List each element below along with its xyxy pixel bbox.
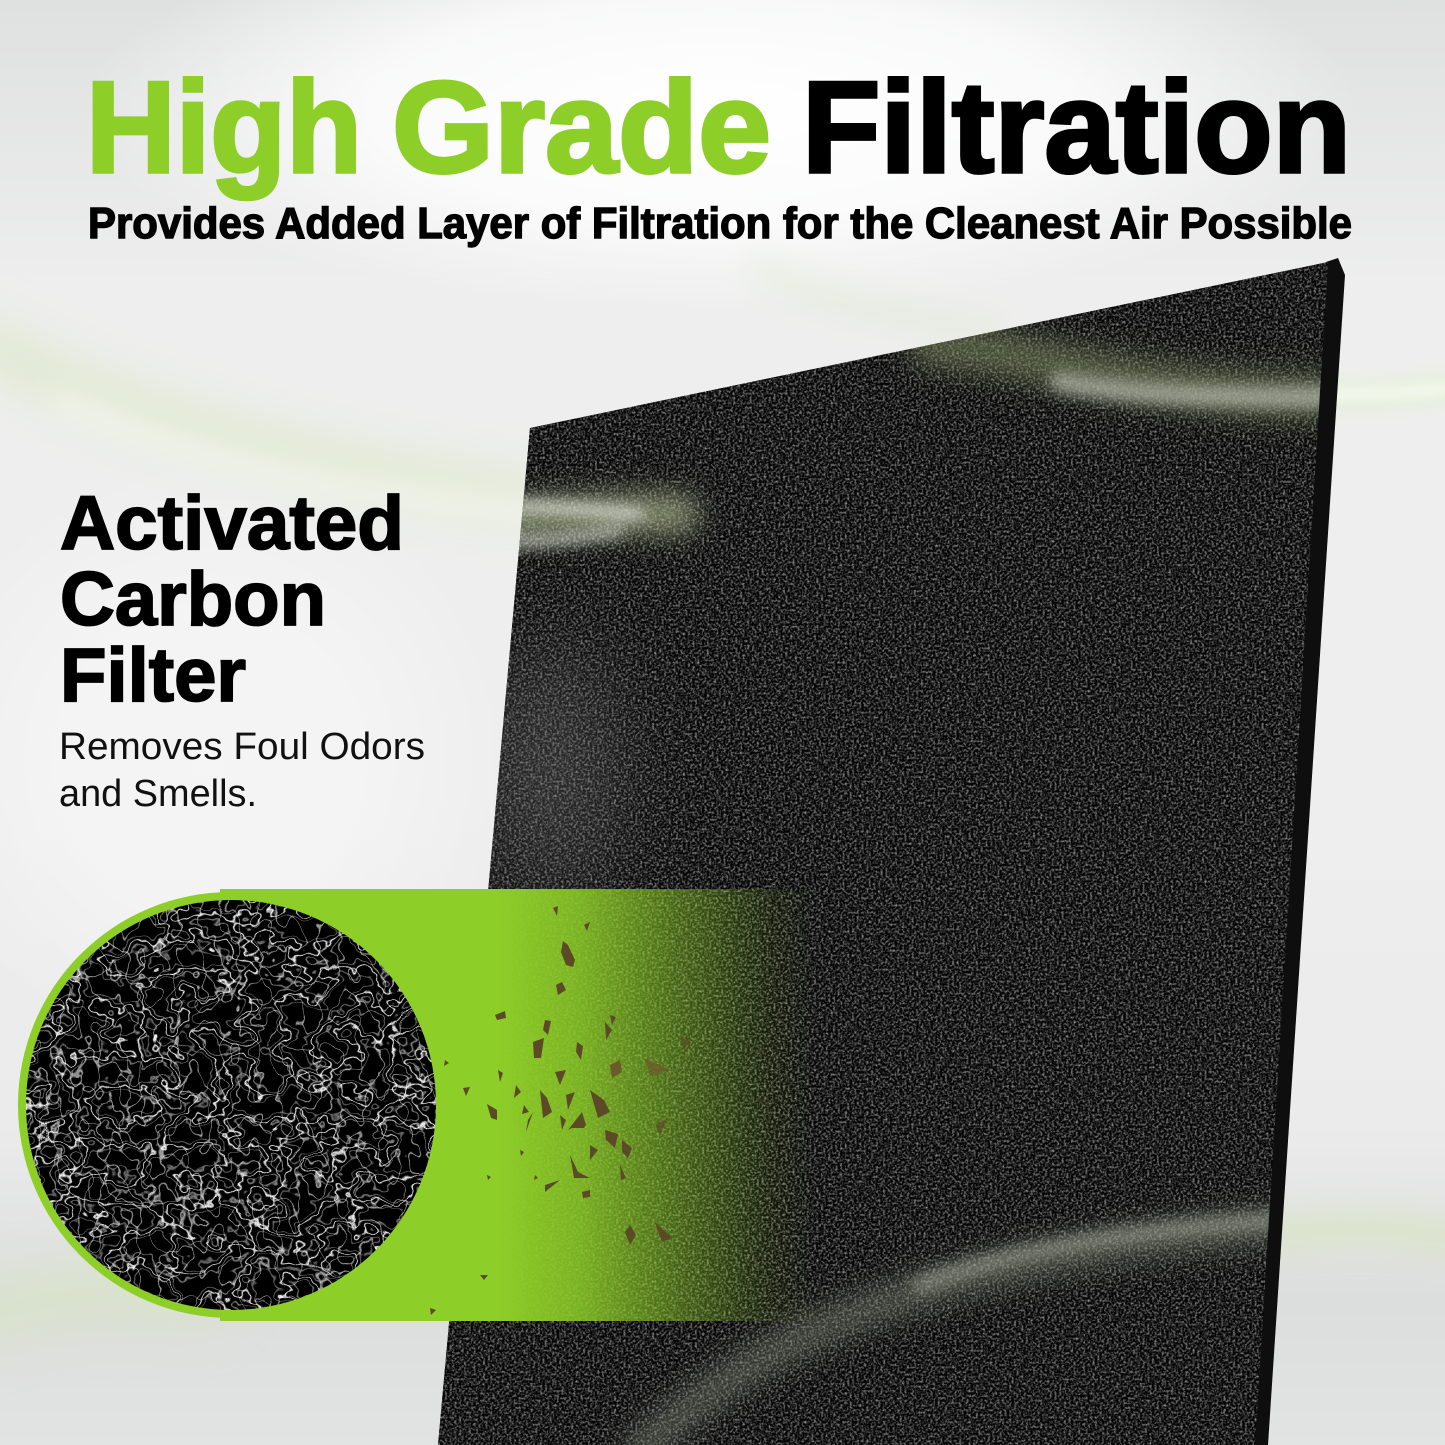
heading: Activated Carbon Filter: Filter — [60, 633, 246, 718]
air wisp middle left — [500, 506, 680, 542]
panel: carbon filter sheet — [430, 255, 1345, 1445]
magnified fiber circle — [18, 892, 444, 1318]
air wisp lower — [640, 1220, 1280, 1445]
heading: Activated Carbon Filter — [60, 481, 404, 718]
heading: Activated Carbon Filter: Carbon — [60, 557, 326, 642]
title — [86, 54, 1351, 200]
air wisp upper right — [930, 345, 1340, 397]
title: High Grade: High — [86, 54, 362, 200]
dirt particles — [430, 906, 692, 1315]
filter texture — [430, 255, 1340, 1445]
description text: and Smells. — [59, 773, 257, 815]
title: High Grade — [86, 54, 771, 200]
description text: Removes Foul Odors — [59, 726, 425, 768]
filter side edge — [1253, 258, 1345, 1445]
filter front face — [438, 262, 1328, 1445]
heading: Activated Carbon Filter: Activated — [60, 481, 404, 566]
title: Filtration: Filtration — [802, 54, 1351, 200]
fiber texture — [26, 900, 437, 1311]
green circle outline — [18, 892, 444, 1318]
subtitle: Provides Added Layer of Filtration for the Cleanest Air Possible — [88, 199, 1352, 248]
title: High Grade: Grade — [392, 54, 771, 200]
description text — [59, 726, 425, 815]
background green air wisps — [0, 270, 1445, 1320]
green magnifier band — [220, 889, 820, 1321]
